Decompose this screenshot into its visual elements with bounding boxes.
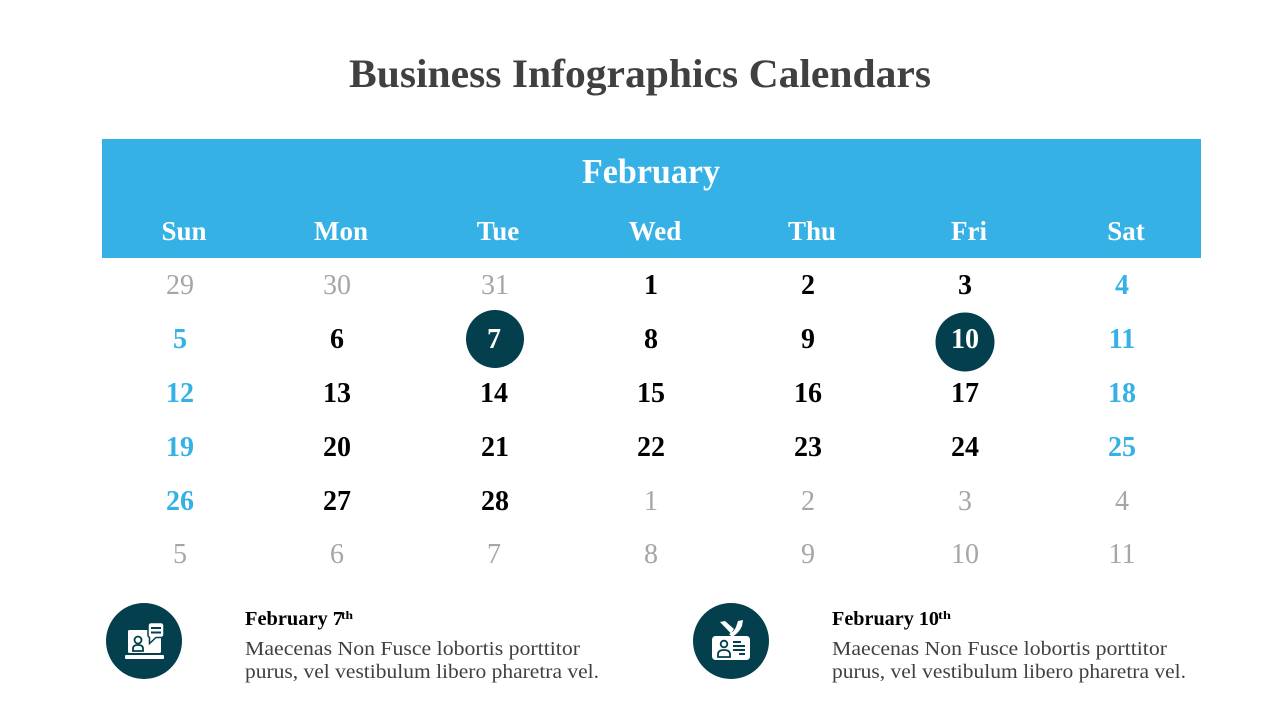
week row 5: 28 (481, 486, 509, 517)
week row 6 (173, 539, 1135, 570)
week row 1: 1 (644, 270, 658, 301)
text block: February 7th: purus, vel vestibulum libero pharetra vel. (245, 661, 599, 683)
week row 2: 6 (330, 324, 344, 355)
month heading: February (582, 152, 720, 191)
weekday labels: Sat (1107, 216, 1145, 246)
weekday labels: Fri (951, 216, 987, 246)
week row 4: 21 (481, 432, 509, 463)
week row 5: 2 (801, 486, 815, 517)
weekday labels: Sun (161, 216, 207, 246)
text block: February 7th: th (341, 608, 353, 622)
week row 3: 18 (1108, 378, 1136, 409)
week row 3: 12 (166, 378, 194, 409)
week row 6: 10 (951, 539, 979, 570)
week row 4: 23 (794, 432, 822, 463)
week row 3: 17 (951, 378, 979, 409)
week row 2 (173, 324, 1135, 355)
week row 1: 3 (958, 270, 972, 301)
week row 2: 8 (644, 324, 658, 355)
highlight: February 10 (936, 312, 994, 372)
icon: laptop with chat (106, 603, 182, 679)
calendar date grid (166, 270, 1136, 570)
text block: February 10th: February 10 (832, 608, 939, 630)
week row 6: 6 (330, 539, 344, 570)
text block: February 10th: Maecenas Non Fusce lobortis porttitor (832, 638, 1167, 660)
week row 4: 24 (951, 432, 979, 463)
panel: calendar header (102, 139, 1201, 258)
highlight: February 7 (466, 310, 524, 368)
week row 4: 20 (323, 432, 351, 463)
week row 2: 9 (801, 324, 815, 355)
week row 2: 11 (1109, 324, 1135, 355)
week row 1: 30 (323, 270, 351, 301)
text block: February 7th: February 7 (245, 608, 343, 630)
week row 5: 26 (166, 486, 194, 517)
week row 1: 31 (481, 270, 509, 301)
week row 2: 7 (487, 324, 501, 355)
week row 3: 14 (480, 378, 508, 409)
weekday labels: Thu (788, 216, 836, 246)
week row 6: 11 (1109, 539, 1135, 570)
weekday labels (161, 216, 1145, 246)
weekday labels: Wed (629, 216, 681, 246)
title: Business Infographics Calendars (349, 51, 931, 96)
icon: ID badge (693, 603, 769, 679)
text block: February 10th: purus, vel vestibulum libero pharetra vel. (832, 661, 1186, 683)
week row 5: 27 (323, 486, 351, 517)
weekday labels: Mon (314, 216, 368, 246)
week row 6: 7 (487, 539, 501, 570)
week row 5 (166, 486, 1129, 517)
week row 3 (166, 378, 1136, 409)
week row 2: 10 (951, 324, 979, 355)
week row 3: 16 (794, 378, 822, 409)
text block: February 7th: Maecenas Non Fusce lobortis porttitor (245, 638, 580, 660)
week row 4 (166, 432, 1136, 463)
text block: February 7th (245, 608, 599, 683)
week row 2: 5 (173, 324, 187, 355)
week row 1: 29 (166, 270, 194, 301)
week row 6: 5 (173, 539, 187, 570)
week row 3: 15 (637, 378, 665, 409)
week row 6: 8 (644, 539, 658, 570)
week row 1: 2 (801, 270, 815, 301)
week row 1 (166, 270, 1129, 301)
week row 4: 19 (166, 432, 194, 463)
week row 1: 4 (1115, 270, 1129, 301)
week row 5: 3 (958, 486, 972, 517)
week row 4: 25 (1108, 432, 1136, 463)
week row 3: 13 (323, 378, 351, 409)
week row 5: 4 (1115, 486, 1129, 517)
text block: February 10th (832, 608, 1186, 683)
week row 6: 9 (801, 539, 815, 570)
week row 4: 22 (637, 432, 665, 463)
week row 5: 1 (644, 486, 658, 517)
text block: February 10th: th (938, 608, 951, 622)
weekday labels: Tue (477, 216, 519, 246)
